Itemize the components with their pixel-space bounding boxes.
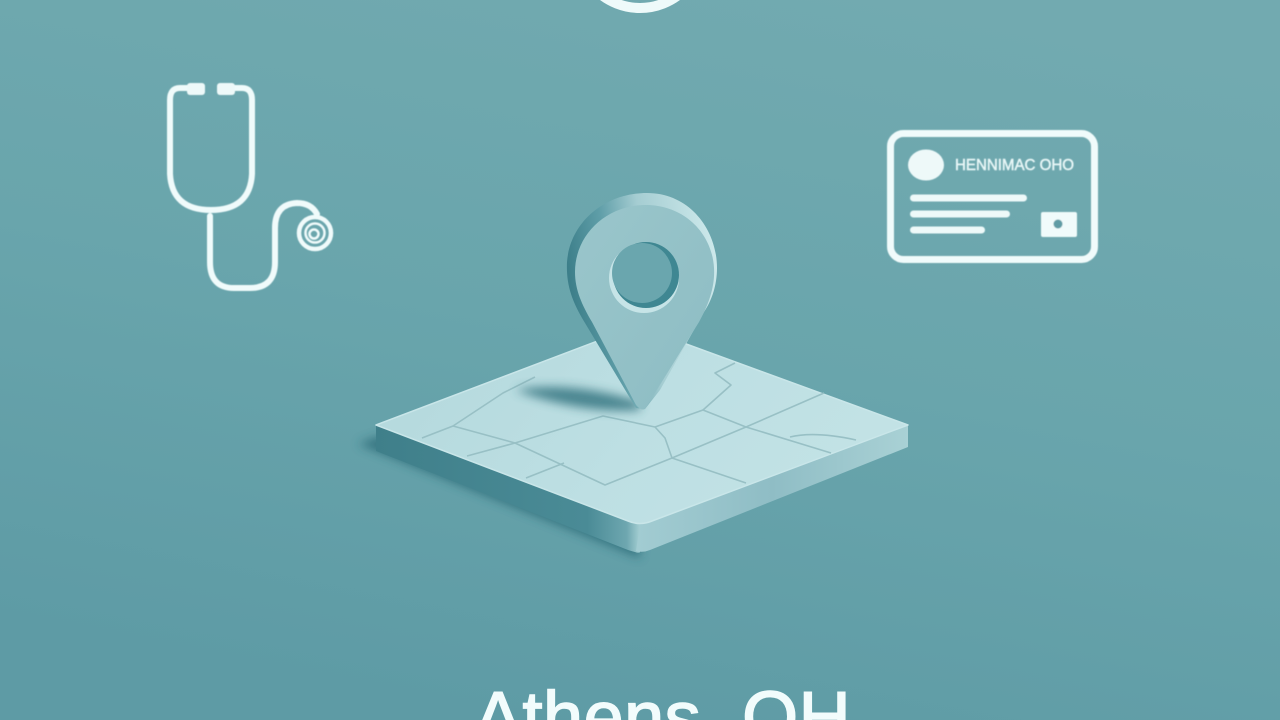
map roads bbox=[422, 363, 856, 485]
platform left side bbox=[376, 425, 640, 553]
pin front face bbox=[575, 205, 714, 410]
card label text: HENNIMAC OHO bbox=[955, 157, 1074, 174]
pin extruded rim bbox=[567, 193, 717, 409]
pin shadow on map bbox=[515, 387, 640, 411]
icon: cropped circle at top bbox=[577, 0, 703, 8]
map platform bbox=[358, 326, 908, 558]
platform top surface bbox=[376, 326, 908, 524]
icon: insurance card bbox=[890, 134, 1094, 260]
icon: stethoscope bbox=[170, 83, 331, 288]
floor shadow bbox=[358, 436, 640, 558]
location pin bbox=[567, 193, 717, 410]
pin hole bbox=[609, 242, 679, 313]
platform right side bbox=[636, 425, 908, 552]
